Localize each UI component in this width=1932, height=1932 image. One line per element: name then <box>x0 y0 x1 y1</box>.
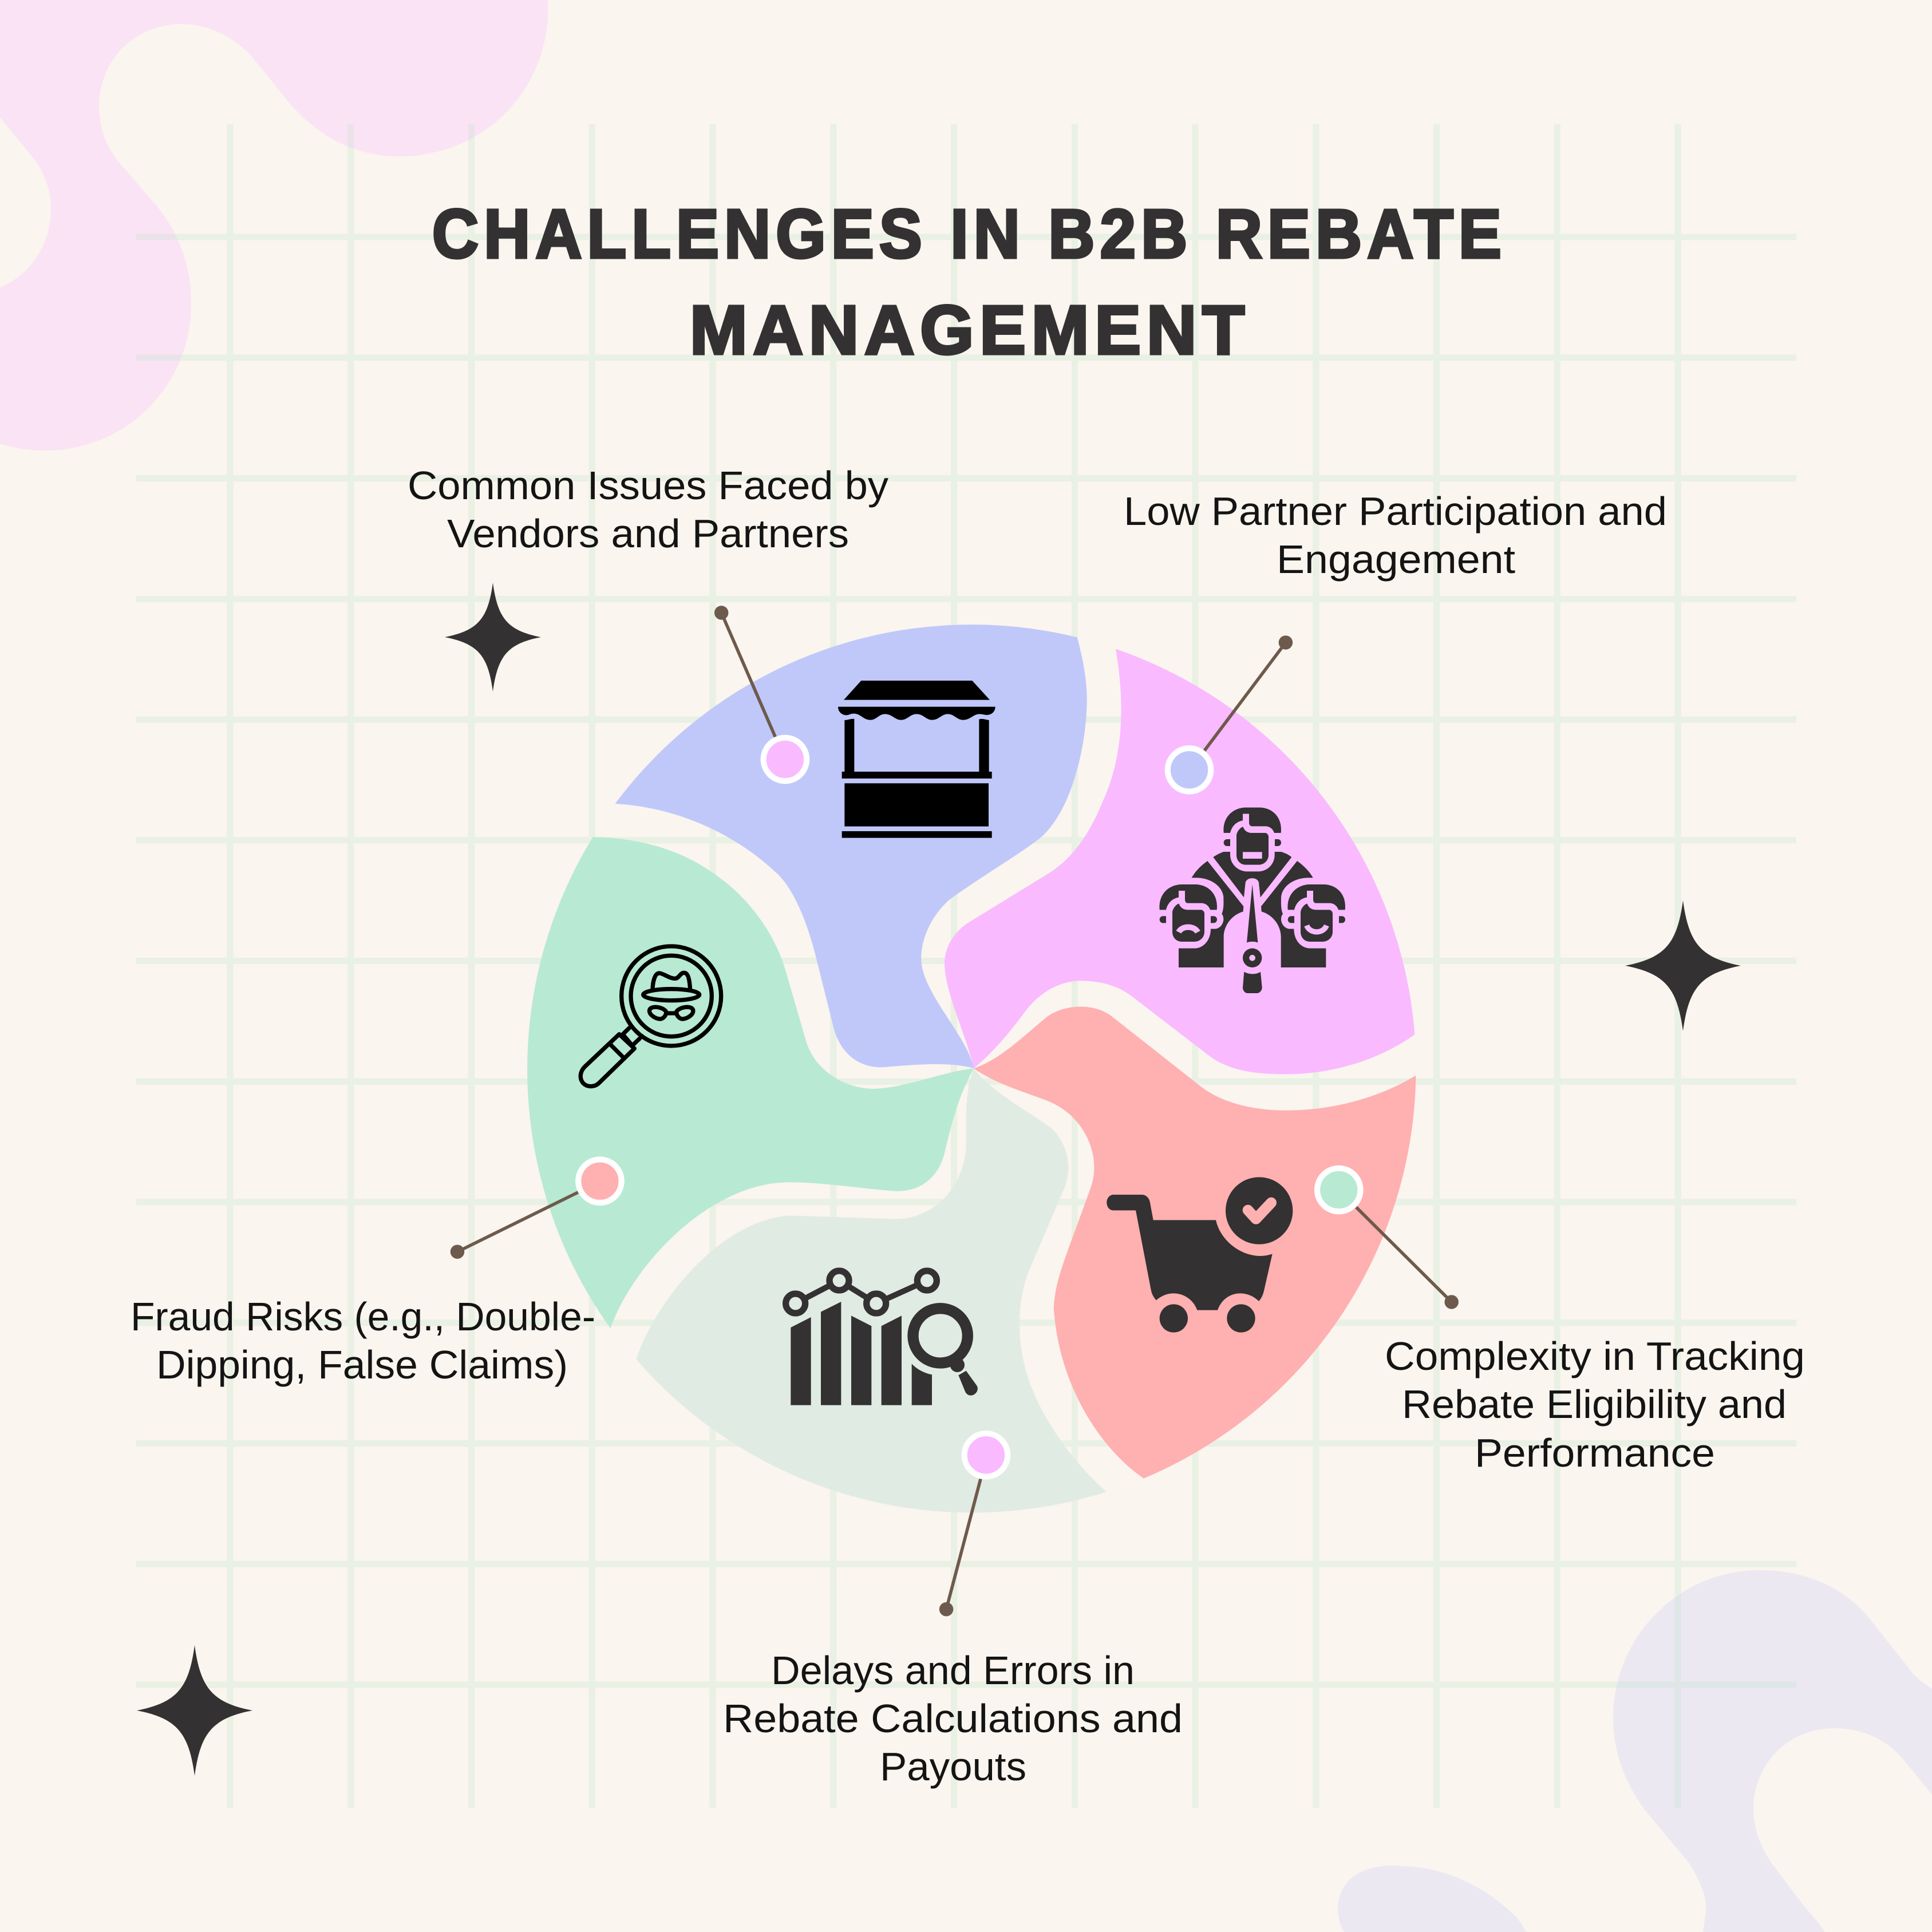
icon: detective magnifier <box>580 946 721 1086</box>
pinwheel chart <box>451 606 1459 1616</box>
petal: pink <box>945 649 1415 1074</box>
petal: red <box>974 1006 1416 1479</box>
title: MANAGEMENT <box>690 291 1250 369</box>
connector: complexity <box>1317 1168 1459 1309</box>
icon: market stall <box>838 681 995 838</box>
label: common issues: Vendors and Partners <box>447 511 849 556</box>
blob: pink top-left <box>0 0 548 451</box>
star: right <box>1625 900 1741 1031</box>
label: common issues <box>408 463 888 556</box>
title: CHALLENGES IN B2B REBATE <box>432 195 1507 272</box>
label: complexity: Complexity in Tracking <box>1385 1334 1805 1378</box>
icon: three people with gauge <box>1159 808 1345 993</box>
star: upper left <box>445 583 541 692</box>
icon: chart with magnifier <box>786 1271 978 1405</box>
connector: common issues <box>714 606 807 781</box>
label: fraud risks: Dipping, False Claims) <box>156 1342 568 1387</box>
label: low participation: Engagement <box>1277 537 1515 582</box>
label: fraud risks: Fraud Risks (e.g., Double- <box>131 1294 595 1339</box>
label: complexity: Performance <box>1475 1431 1715 1475</box>
label: low participation: Low Partner Participation and <box>1124 489 1667 534</box>
label: delays: Delays and Errors in <box>771 1648 1135 1693</box>
label: fraud risks <box>131 1294 595 1387</box>
label: common issues: Common Issues Faced by <box>408 463 888 508</box>
label: low participation <box>1124 489 1667 582</box>
label: complexity <box>1385 1334 1805 1475</box>
connector: low participation <box>1168 635 1293 792</box>
label: delays: Payouts <box>880 1744 1026 1789</box>
connector: delays <box>939 1433 1008 1616</box>
petal: sage <box>636 1068 1107 1512</box>
blob: lavender bottom small <box>1338 1866 1527 1932</box>
label: delays: Rebate Calculations and <box>723 1696 1183 1741</box>
connector: fraud <box>451 1160 622 1259</box>
star: lower left <box>137 1645 252 1776</box>
label: complexity: Rebate Eligibility and <box>1402 1382 1787 1427</box>
blob: lavender bottom-right large <box>1613 1570 1932 1932</box>
petal: blue <box>615 625 1087 1068</box>
icon: shopping cart with check <box>1107 1177 1293 1333</box>
petal: green <box>527 837 974 1328</box>
title <box>432 195 1507 369</box>
label: delays <box>723 1648 1183 1789</box>
